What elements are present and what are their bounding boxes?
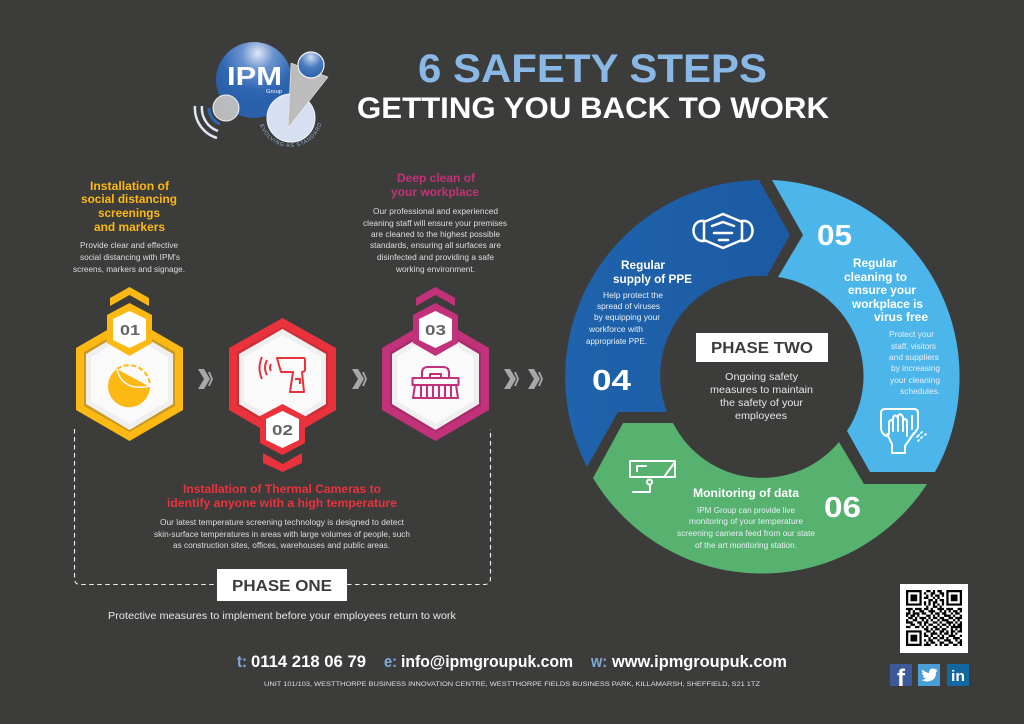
contact details: e:: [384, 652, 397, 671]
panel: step 05 cleaning: workplace is: [851, 299, 923, 311]
panel: step 04 PPE: appropriate PPE.: [586, 337, 647, 346]
arrow: step 1 to 2: [198, 369, 213, 389]
panel: step 06 monitoring: IPM Group can provide live: [697, 506, 796, 515]
text block: step 01: screens, markers and signage.: [73, 265, 185, 274]
phase two label: [696, 333, 828, 362]
arrow: step 2 to 3: [352, 369, 367, 389]
panel: step 06 monitoring: screening camera feed from our state: [677, 529, 816, 538]
contact details: t:: [237, 652, 247, 671]
text block: step 03: are cleaned to the highest possible: [371, 230, 501, 239]
text block: step 03: standards, ensuring all surfaces are: [370, 241, 502, 250]
text block: step 01: and markers: [94, 222, 165, 234]
panel: step 04 PPE: 04: [592, 365, 631, 397]
panel: step 05 cleaning: schedules.: [900, 387, 940, 396]
text block: step 01: social distancing: [81, 194, 177, 206]
icon: security camera: [630, 461, 675, 492]
text block: step 01: screenings: [98, 208, 160, 220]
phase two description: [710, 372, 813, 422]
contact details: www.ipmgroupuk.com: [611, 652, 787, 671]
panel: step 06 monitoring: of the art monitoring station.: [695, 541, 797, 550]
phase two label: PHASE TWO: [711, 340, 813, 357]
panel: step 05 cleaning: cleaning to: [844, 272, 907, 284]
text block: step 03: working environment.: [395, 265, 475, 274]
badge 03: 03: [425, 322, 446, 339]
panel: step 05 cleaning: 05: [817, 220, 852, 252]
phase one dashed bracket: [74, 429, 490, 584]
icon: linkedin: [947, 664, 969, 686]
panel: step 05 cleaning: Regular: [853, 258, 898, 270]
icon: twitter: [918, 664, 940, 686]
icon: ball: [108, 365, 151, 407]
badge 01: [107, 287, 152, 356]
arrow: phase one to phase two: [504, 369, 543, 389]
address: UNIT 101/103, WESTTHORPE BUSINESS INNOVATION CENTRE, WESTTHORPE FIELDS BUSINESS PARK, KILLAMARSH, SHEFFIELD, S21 1TZ: [264, 681, 760, 688]
panel: step 05 cleaning: staff, visitors: [891, 342, 936, 351]
logo: IPM Group: EVOLVING AS STANDARD: [260, 123, 321, 148]
text block: step 02: skin-surface temperatures in areas with large volumes of people, such: [154, 530, 410, 539]
title: GETTING YOU BACK TO WORK: [357, 92, 829, 125]
contact details: info@ipmgroupuk.com: [401, 652, 573, 671]
panel: step 05 cleaning: ensure your: [848, 285, 917, 297]
panel: step 04 PPE: Help protect the: [603, 291, 664, 300]
text block: step 02: Our latest temperature screening technology is designed to detect: [160, 518, 405, 527]
text block: step 03: Deep clean of: [397, 173, 475, 185]
phase two description: measures to maintain: [710, 385, 813, 396]
panel: step 06 monitoring: [593, 423, 927, 574]
icon: mask: [694, 214, 752, 248]
phase two description: the safety of your: [720, 398, 804, 409]
text block: step 02: as construction sites, offices, warehouses and public areas.: [173, 541, 390, 550]
panel: step 05 cleaning: Protect your: [889, 330, 934, 339]
icon: linkedin: in: [951, 668, 965, 685]
text block: step 02: Installation of Thermal Cameras to: [183, 484, 381, 496]
text block: step 02: [154, 484, 410, 550]
text block: step 03: Our professional and experienced: [373, 207, 498, 216]
icon: facebook: [890, 664, 912, 692]
icon: hand wiping: [881, 409, 926, 453]
panel: step 05 cleaning: [772, 180, 960, 472]
panel: step 06 monitoring: Monitoring of data: [693, 488, 800, 500]
text block: step 01: social distancing with IPM's: [80, 253, 180, 262]
logo: IPM Group: Group: [266, 89, 282, 95]
icon: facebook: f: [897, 665, 906, 692]
panel: step 04 PPE: [565, 180, 790, 467]
icon: thermal camera: [260, 357, 305, 392]
panel: step 05 cleaning: by increasing: [891, 364, 940, 373]
panel: step 06 monitoring: 06: [824, 492, 861, 524]
badge 01: 01: [120, 322, 140, 339]
badge 03: [413, 287, 458, 356]
phase one description: Protective measures to implement before your employees return to work: [108, 610, 457, 622]
step 02 hexagon: [229, 318, 336, 472]
panel: step 05 cleaning: virus free: [874, 312, 928, 324]
panel: step 04 PPE: Regular: [621, 260, 666, 272]
phase two description: employees: [735, 411, 787, 422]
QR code: [900, 584, 968, 653]
icon: brush: [412, 367, 458, 398]
badge 02: 02: [272, 422, 293, 439]
phase one label: PHASE ONE: [232, 578, 332, 595]
panel: step 04 PPE: spread of viruses: [597, 302, 660, 311]
contact details: w:: [590, 652, 607, 671]
text block: step 03: your workplace: [391, 187, 479, 199]
text block: step 01: Installation of: [90, 181, 169, 193]
text block: step 01: [73, 181, 185, 274]
text block: step 03: disinfected and providing a safe: [377, 253, 495, 262]
text block: step 03: cleaning staff will ensure your premises: [363, 219, 507, 228]
logo: IPM Group: IPM: [227, 61, 282, 91]
phase two description: Ongoing safety: [725, 372, 798, 383]
contact details: [237, 652, 787, 671]
logo: IPM Group: [194, 42, 328, 148]
title: 6 SAFETY STEPS: [418, 47, 767, 91]
panel: step 05 cleaning: and suppliers: [889, 353, 939, 362]
panel: step 04 PPE: by equipping your: [594, 313, 660, 322]
title: [357, 47, 829, 125]
text block: step 01: Provide clear and effective: [80, 241, 179, 250]
step 01 hexagon: [76, 287, 183, 441]
badge 02: [260, 404, 305, 472]
panel: step 06 monitoring: monitoring of your temperature: [689, 517, 804, 526]
panel: step 04 PPE: workforce with: [588, 325, 643, 334]
contact details: 0114 218 06 79: [251, 652, 366, 671]
panel: step 05 cleaning: your cleaning: [890, 376, 940, 385]
panel: step 04 PPE: supply of PPE: [613, 274, 692, 286]
text block: step 03: [363, 173, 507, 274]
phase one label: [217, 569, 347, 601]
step 03 hexagon: [382, 287, 489, 441]
text block: step 02: identify anyone with a high temperature: [167, 498, 397, 510]
